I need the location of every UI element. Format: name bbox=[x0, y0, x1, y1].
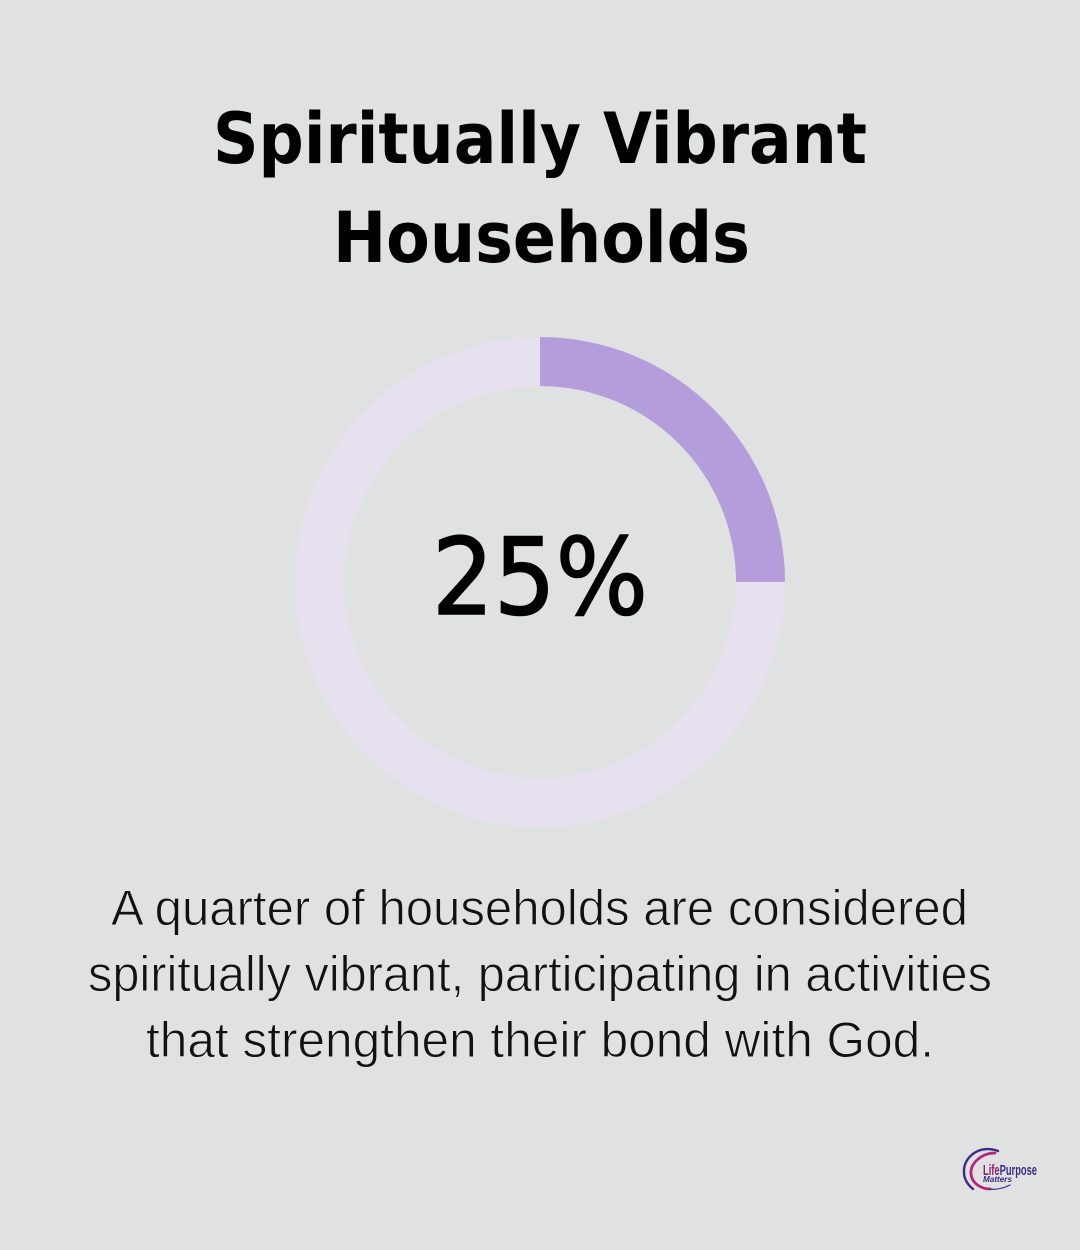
donut chart: 25% bbox=[320, 337, 785, 802]
center percentage: 25% bbox=[432, 516, 648, 639]
description text: that strengthen their bond with God. bbox=[146, 1012, 934, 1068]
title bbox=[213, 98, 867, 279]
title: Spiritually Vibrant bbox=[213, 98, 867, 180]
description text: A quarter of households are considered bbox=[111, 880, 968, 936]
highlighted quarter arc bbox=[540, 337, 785, 582]
description text bbox=[88, 880, 992, 1068]
title: Households bbox=[333, 197, 750, 279]
logo: Life Purpose Matters bbox=[964, 1149, 1037, 1189]
logo wordmark: LifePurpose bbox=[983, 1162, 1037, 1179]
description text: spiritually vibrant, participating in activities bbox=[88, 946, 992, 1002]
logo arcs bbox=[964, 1149, 1010, 1189]
logo tagline: Matters bbox=[983, 1175, 1013, 1184]
